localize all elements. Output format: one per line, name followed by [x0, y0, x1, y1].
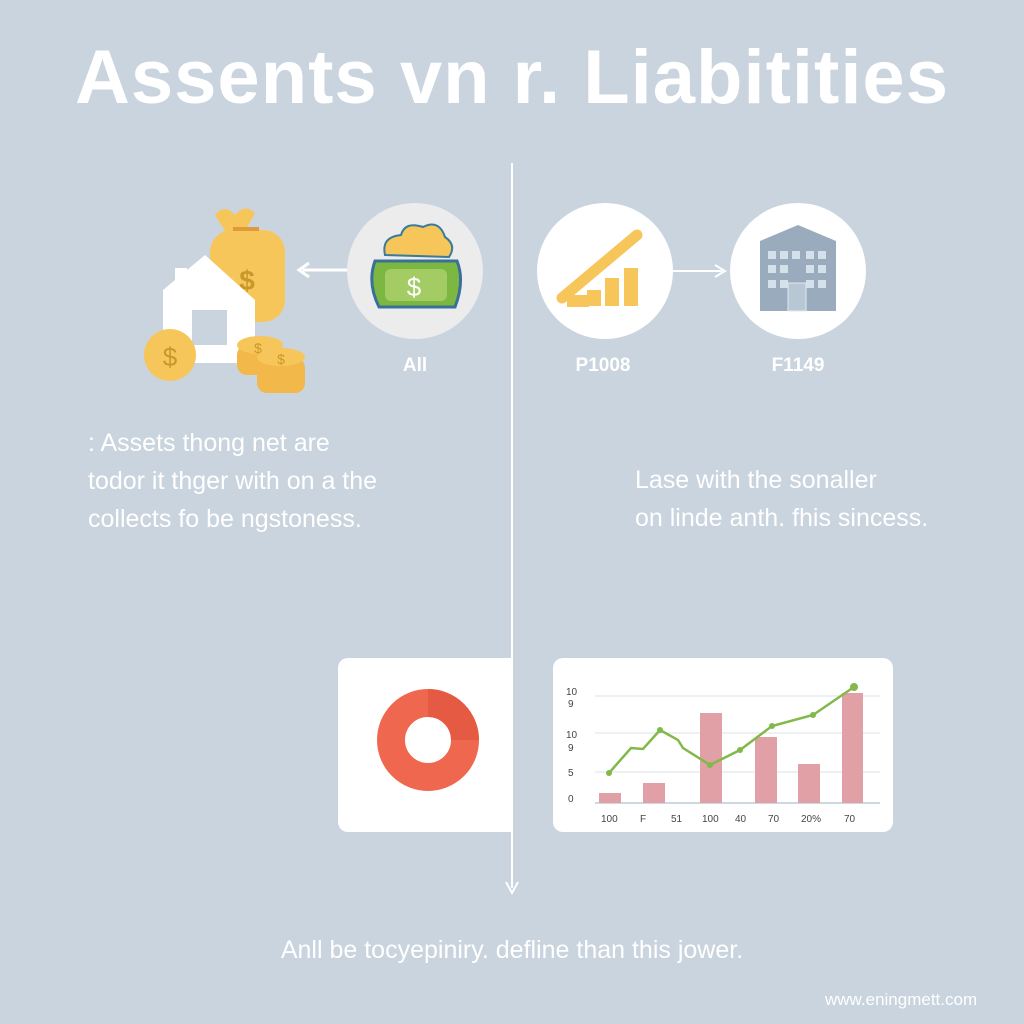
divider arrow: [505, 163, 519, 895]
panel: bar line chart: [553, 658, 893, 832]
icon: growth chart circle: [537, 203, 673, 339]
panel: bar line chart: 9: [568, 743, 574, 754]
panel: bar line chart: 70: [844, 814, 856, 825]
arrow: right: [673, 264, 727, 278]
icon: money pot circle: [347, 203, 483, 339]
text block: liabilities: on linde anth. fhis sincess.: [635, 504, 928, 532]
panel: bar line chart: 100: [702, 814, 719, 825]
arrow: left: [296, 262, 348, 278]
panel: bar line chart: 5: [568, 768, 574, 779]
panel: bar line chart: 20%: [801, 814, 821, 825]
label: All: All: [403, 355, 427, 376]
icon: building circle: [730, 203, 866, 339]
icon: assets cluster: [144, 208, 305, 393]
label: F1149: F1149: [772, 355, 824, 376]
icon: assets cluster: $: [254, 340, 262, 356]
icon: assets cluster: $: [239, 265, 255, 296]
text block: assets: todor it thger with on a the: [88, 467, 377, 495]
text block: liabilities: [635, 466, 928, 532]
panel: bar line chart: 40: [735, 814, 747, 825]
panel: donut: [338, 658, 512, 832]
panel: bar line chart: 100: [601, 814, 618, 825]
url: www.eningmett.com: [825, 990, 977, 1009]
text block: liabilities: Lase with the sonaller: [635, 466, 877, 494]
footer text: Anll be tocyepiniry. defline than this jower.: [281, 936, 743, 964]
label: P1008: P1008: [576, 355, 630, 376]
panel: bar line chart: 51: [671, 814, 683, 825]
panel: bar line chart: 10: [566, 730, 578, 741]
panel: bar line chart: 0: [568, 794, 574, 805]
text block: assets: collects fo be ngstoness.: [88, 505, 362, 533]
panel: bar line chart: F: [640, 814, 646, 825]
icon: assets cluster: $: [277, 351, 285, 367]
panel: bar line chart: 10: [566, 687, 578, 698]
donut chart: [377, 689, 479, 791]
text block: assets: : Assets thong net are: [88, 429, 330, 457]
icon: assets cluster: $: [163, 342, 178, 372]
title: Assents vn r. Liabitities: [75, 35, 949, 120]
text block: assets: [88, 429, 377, 533]
panel: bar line chart: 9: [568, 699, 574, 710]
icon: money pot circle: $: [407, 272, 422, 302]
panel: bar line chart: 70: [768, 814, 780, 825]
